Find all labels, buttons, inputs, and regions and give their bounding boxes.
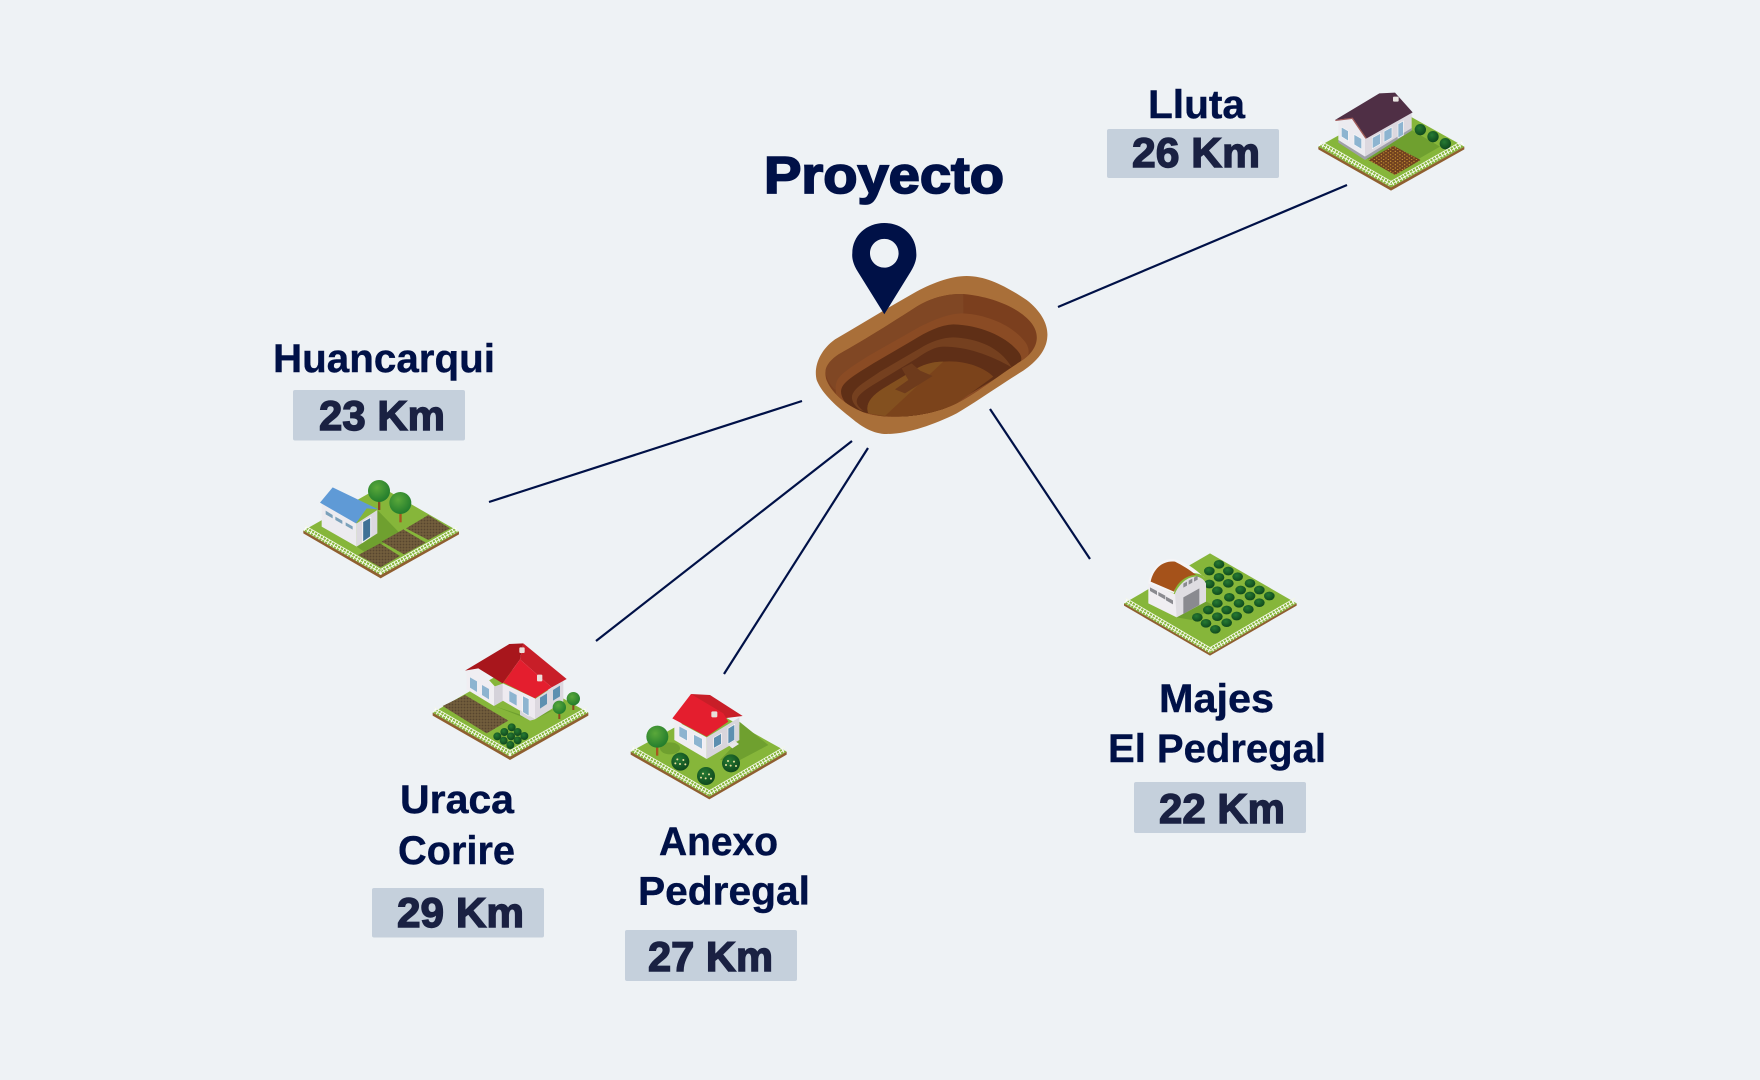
icon: large house with red roof — [433, 643, 588, 760]
distance badge: 22 Km — [1134, 782, 1306, 833]
title: Proyecto: Proyecto — [764, 147, 1004, 205]
distance badge: 23 Km — [293, 390, 465, 440]
distance badge: 22 Km: 22 Km — [1159, 785, 1285, 832]
icon: open pit mine — [816, 276, 1047, 434]
label: Huancarqui: Huancarqui — [273, 337, 495, 381]
distance badge: 29 Km: 29 Km — [397, 889, 524, 936]
location: Huancarqui — [273, 337, 495, 578]
label: Majes El Pedregal — [1108, 677, 1326, 771]
icon: barn with crop field — [1124, 553, 1297, 656]
icon: small house with red roof — [631, 694, 787, 799]
label: Uraca Corire: Uraca — [400, 778, 515, 822]
distance badge: 23 Km: 23 Km — [319, 392, 445, 439]
location: Uraca Corire — [372, 643, 588, 938]
distance badge: 26 Km: 26 Km — [1132, 129, 1260, 176]
icon: house with purple roof — [1318, 93, 1464, 191]
distance badge: 27 Km — [625, 930, 797, 981]
location: Lluta — [1107, 83, 1464, 191]
location: Majes El Pedregal — [1108, 553, 1326, 833]
label: Lluta: Lluta — [1148, 83, 1246, 127]
icon: house with blue roof — [303, 480, 459, 578]
connector lines — [489, 185, 1347, 674]
label: Uraca Corire: Corire — [398, 829, 515, 873]
icon: location pin — [852, 223, 916, 314]
location: Anexo Pedregal — [625, 694, 810, 981]
label: Majes El Pedregal: Majes — [1159, 677, 1274, 721]
label: Majes El Pedregal: El Pedregal — [1108, 727, 1326, 771]
distance badge: 29 Km — [372, 888, 544, 938]
label: Anexo Pedregal: Pedregal — [638, 870, 810, 914]
distance badge: 27 Km: 27 Km — [648, 933, 773, 980]
label: Anexo Pedregal — [638, 820, 810, 914]
label: Uraca Corire — [398, 778, 515, 873]
label: Anexo Pedregal: Anexo — [659, 820, 778, 864]
